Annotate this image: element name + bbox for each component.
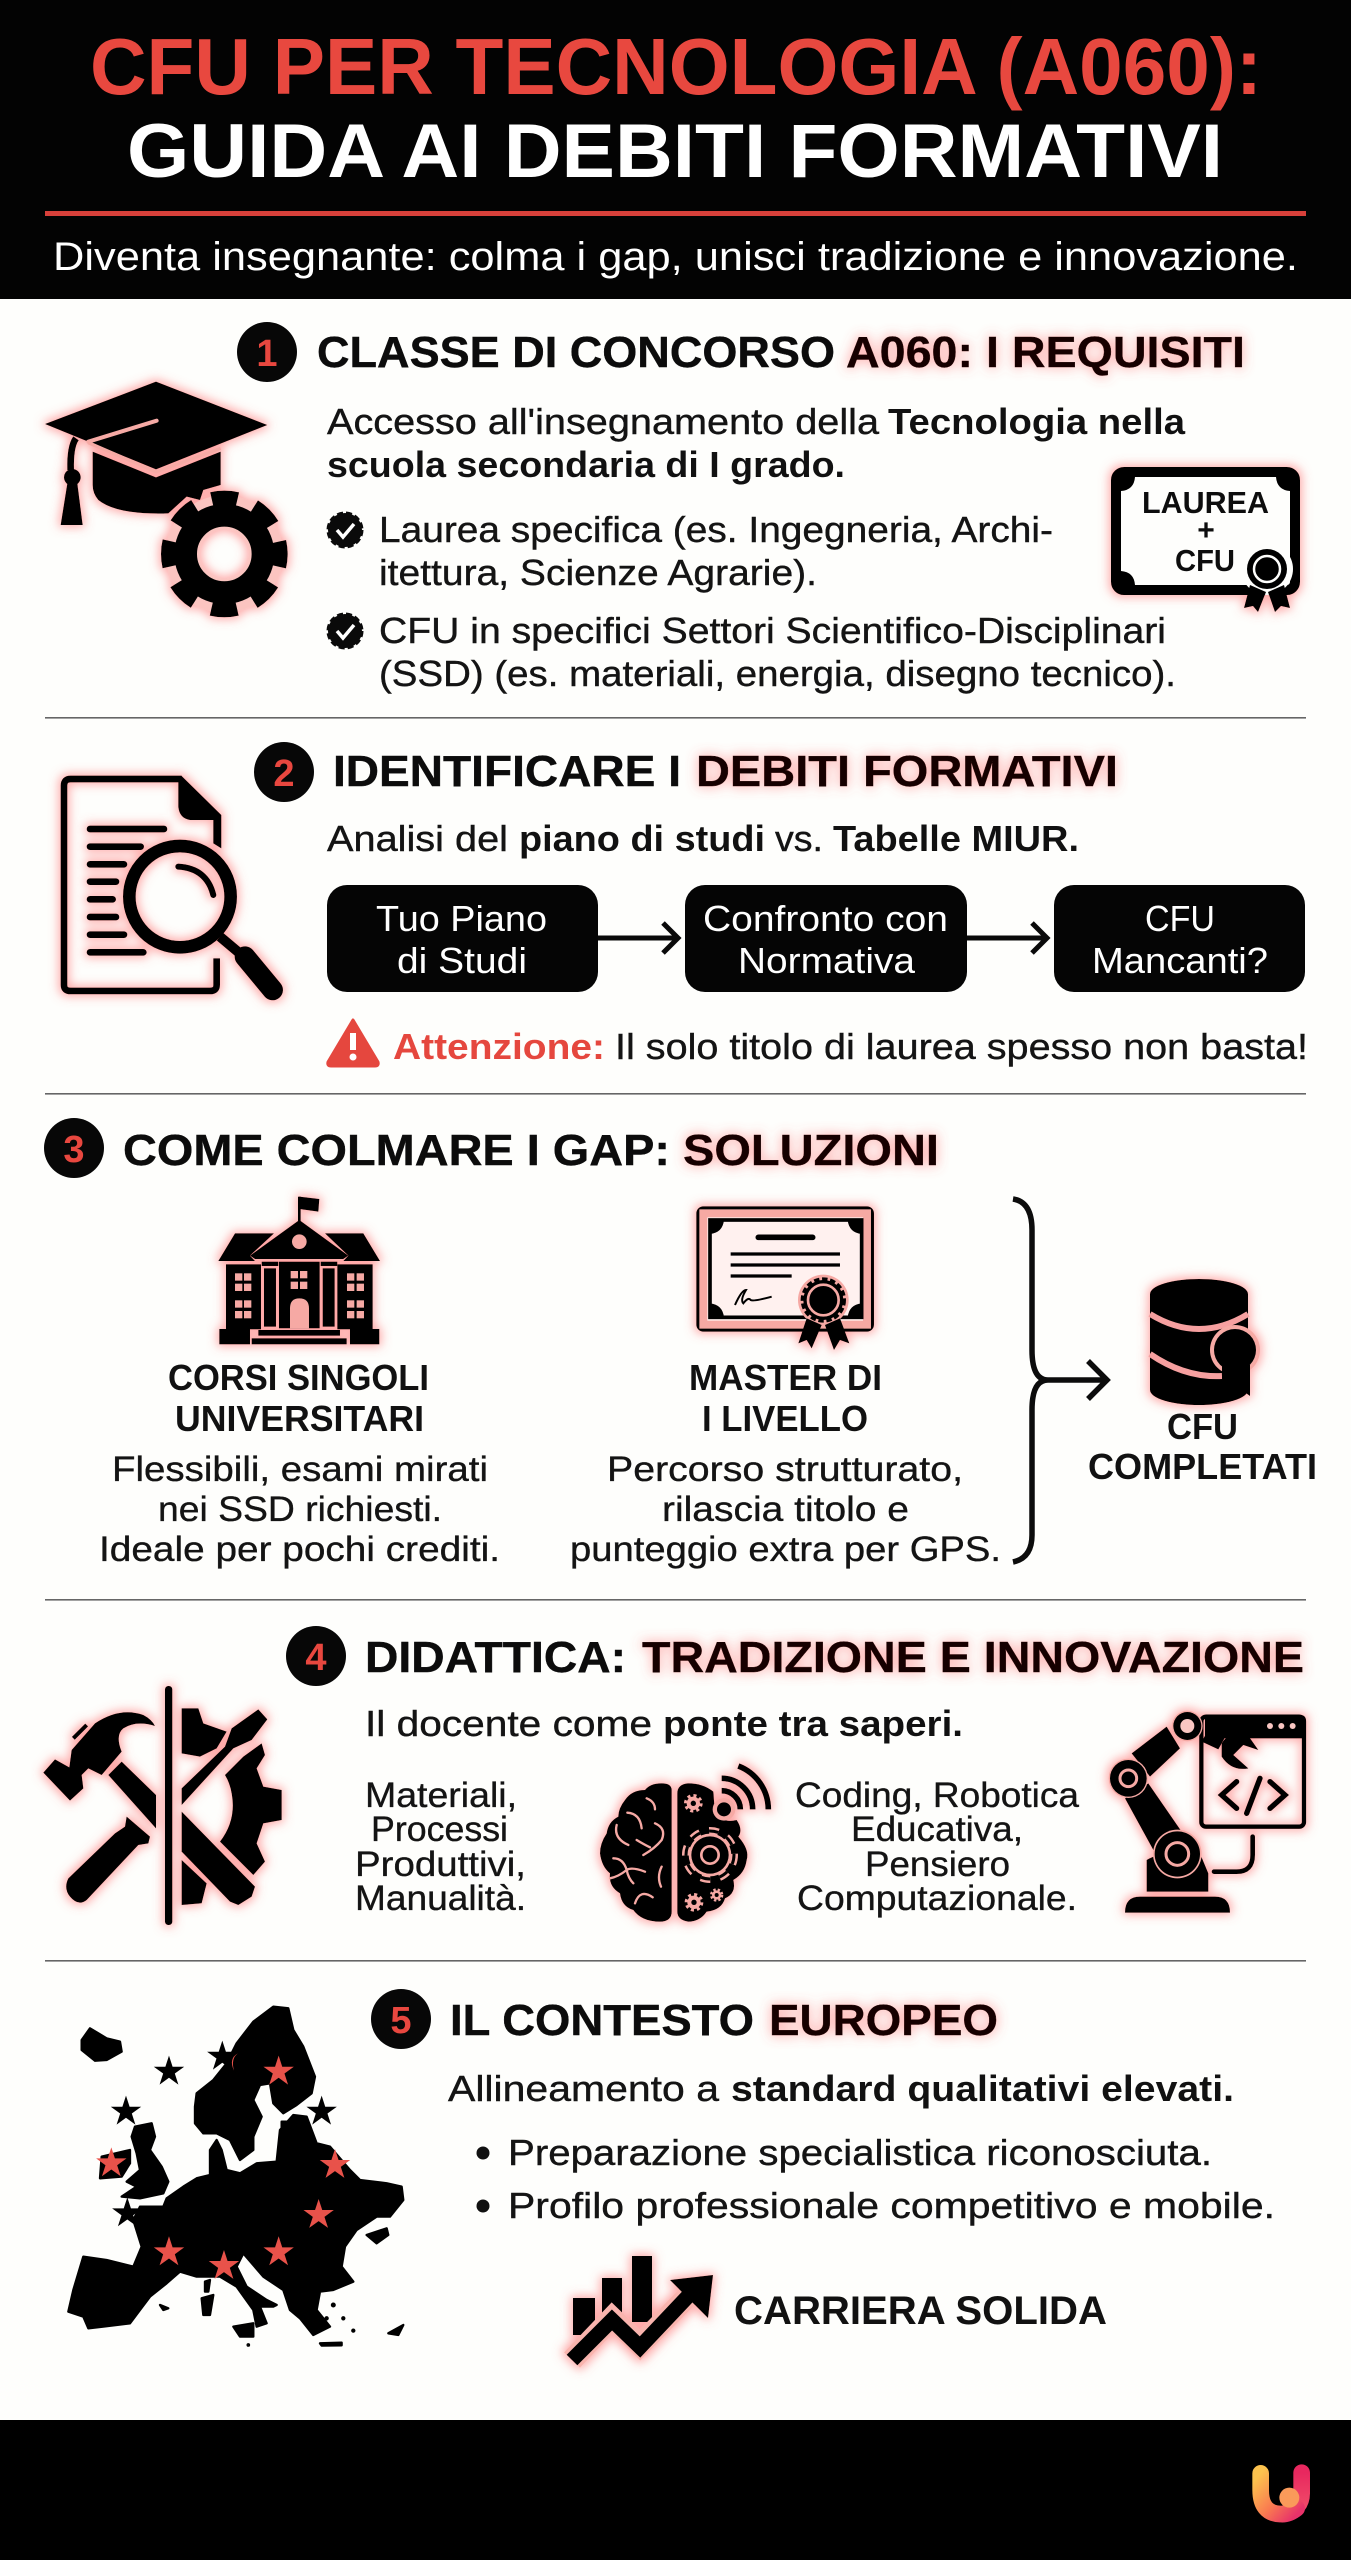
card text: corsi singoli	[99, 1357, 500, 1569]
number badge 4	[286, 1626, 346, 1686]
flow box: confronto: Confronto con	[703, 898, 948, 939]
number badge 1: 1	[256, 333, 278, 375]
panel: section 2 debiti formativi	[64, 742, 1308, 1067]
header band	[0, 0, 1351, 299]
header red rule	[45, 211, 1306, 216]
number badge 4: 4	[305, 1637, 327, 1679]
result label	[1088, 1406, 1317, 1487]
card text: corsi singoli: Flessibili, esami mirati	[112, 1450, 488, 1489]
card text: corsi singoli: nei SSD richiesti.	[158, 1490, 442, 1529]
icon: laurea + cfu certificate	[1116, 472, 1295, 612]
result label: COMPLETATI	[1088, 1446, 1317, 1487]
text: ponte tra saperi	[365, 1703, 963, 1744]
label: carriera solida: CARRIERA SOLIDA	[734, 2289, 1107, 2333]
heading 1: A060: I REQUISITI	[846, 328, 1245, 377]
heading 3: SOLUZIONI	[683, 1126, 939, 1175]
card text: master: Percorso strutturato,	[607, 1450, 963, 1489]
text: tradizione column: Manualità.	[355, 1879, 526, 1918]
bullet: laurea specifica	[328, 509, 1053, 593]
bullet: laurea specifica: Laurea specifica (es. Ingegneria, Archi-	[379, 509, 1053, 550]
heading 2	[333, 747, 1118, 796]
icon: hammer and screwdriver	[43, 1686, 282, 1925]
number badge 5	[371, 1989, 431, 2049]
text: ponte tra saperi: Il docente come	[365, 1703, 652, 1744]
text: ponte tra saperi: ponte tra saperi.	[663, 1703, 963, 1744]
card text: corsi singoli: UNIVERSITARI	[175, 1398, 424, 1439]
card text: corsi singoli: Ideale per pochi crediti.	[99, 1530, 500, 1569]
icon: laurea + cfu certificate: LAUREA	[1142, 485, 1269, 520]
heading 1	[317, 328, 1245, 377]
flow box: cfu mancanti: Mancanti?	[1092, 940, 1268, 981]
heading 4: TRADIZIONE E INNOVAZIONE	[642, 1633, 1304, 1682]
panel: section 1 requisiti	[45, 322, 1295, 694]
flow box: confronto	[685, 885, 967, 992]
panel: section 3 soluzioni	[44, 1118, 1317, 1569]
title line 2: GUIDA AI DEBITI FORMATIVI	[127, 109, 1223, 194]
number badge 3	[44, 1118, 104, 1178]
number badge 5: 5	[390, 2000, 412, 2042]
card text: master: MASTER DI	[689, 1357, 882, 1398]
heading 2: IDENTIFICARE I	[333, 747, 681, 796]
text: innovazione column: Computazionale.	[797, 1879, 1077, 1918]
icon: map of europe with stars	[68, 2007, 403, 2346]
number badge 1	[237, 322, 297, 382]
bracket with arrow	[1013, 1199, 1107, 1562]
analysis line: piano di studi	[519, 818, 765, 859]
card text: corsi singoli: CORSI SINGOLI	[168, 1357, 429, 1398]
card text: master: punteggio extra per GPS.	[570, 1530, 1001, 1569]
intro text	[327, 401, 1186, 485]
panel: section 5 contesto europeo	[68, 1989, 1275, 2360]
heading 3: COME COLMARE I GAP:	[123, 1126, 670, 1175]
bullet: CFU in SSD	[328, 610, 1176, 694]
text: innovazione column: Pensiero	[865, 1845, 1010, 1884]
footer band	[0, 2420, 1351, 2560]
number badge 3: 3	[63, 1129, 85, 1171]
icon: document with magnifier	[64, 776, 273, 991]
logo	[1261, 2473, 1302, 2514]
heading 5: IL CONTESTO	[450, 1996, 754, 2045]
arrow	[967, 923, 1047, 953]
result label: CFU	[1167, 1406, 1238, 1447]
flow box: cfu mancanti	[1054, 885, 1305, 992]
icon: robot arm and code window	[1109, 1711, 1306, 1913]
analysis line: vs.	[775, 818, 823, 859]
arrow	[598, 923, 678, 953]
card text: master	[570, 1357, 1001, 1569]
bullet: CFU in SSD: (SSD) (es. materiali, energia, disegno tecnico).	[379, 653, 1176, 694]
intro text: Tecnologia nella	[888, 401, 1186, 442]
warning line: Il solo titolo di laurea spesso non basta!	[615, 1026, 1308, 1067]
flow box: tuo piano	[327, 885, 598, 992]
heading 4: DIDATTICA:	[365, 1633, 626, 1682]
icon: database with seal	[1150, 1279, 1260, 1405]
text: tradizione column: Produttivi,	[355, 1845, 526, 1884]
intro text: Accesso all'insegnamento della	[327, 401, 880, 442]
title line 1: CFU PER TECNOLOGIA (A060):	[90, 22, 1262, 111]
heading 2: DEBITI FORMATIVI	[696, 747, 1118, 796]
heading 5	[450, 1996, 998, 2045]
heading 3	[123, 1126, 939, 1175]
warning line	[328, 1020, 1308, 1067]
heading 4	[365, 1633, 1304, 1682]
analysis line: Tabelle MIUR.	[833, 818, 1079, 859]
bullet: laurea specifica: itettura, Scienze Agrarie).	[379, 552, 817, 593]
analysis line: Analisi del	[327, 818, 508, 859]
flow box: confronto: Normativa	[738, 940, 916, 981]
warning line: Attenzione:	[393, 1026, 605, 1067]
text: standard qualitativi	[448, 2068, 1234, 2109]
icon: laurea + cfu certificate: CFU	[1175, 543, 1235, 578]
text: innovazione column: Educativa,	[851, 1810, 1023, 1849]
card text: master: I LIVELLO	[702, 1398, 868, 1439]
text: tradizione column: Processi	[371, 1810, 508, 1849]
text: standard qualitativi: standard qualitativi elevati.	[731, 2068, 1234, 2109]
icon: master diploma	[699, 1209, 871, 1350]
text: innovazione column	[795, 1776, 1080, 1918]
text: innovazione column: Coding, Robotica	[795, 1776, 1080, 1815]
analysis line	[327, 818, 1079, 859]
flow box: tuo piano: di Studi	[397, 940, 527, 981]
card text: master: rilascia titolo e	[662, 1490, 909, 1529]
text: standard qualitativi: Allineamento a	[448, 2068, 720, 2109]
panel: section 4 didattica	[43, 1626, 1306, 1925]
bullet: preparazione: Preparazione specialistica riconosciuta.	[508, 2132, 1212, 2173]
text: tradizione column	[355, 1776, 526, 1918]
icon: laurea + cfu certificate: +	[1197, 514, 1215, 547]
icon: graduation cap and gear	[45, 382, 279, 609]
intro text: scuola secondaria di I grado.	[327, 444, 845, 485]
heading 1: CLASSE DI CONCORSO	[317, 328, 835, 377]
flow box: tuo piano: Tuo Piano	[376, 898, 547, 939]
bullet: CFU in SSD: CFU in specifici Settori Scientifico-Disciplinari	[379, 610, 1166, 651]
heading 5: EUROPEO	[769, 1996, 998, 2045]
subtitle: Diventa insegnante: colma i gap, unisci tradizione e innovazione.	[53, 235, 1298, 279]
icon: brain with gears and wifi	[600, 1766, 768, 1922]
text: tradizione column: Materiali,	[365, 1776, 517, 1815]
icon: growth chart arrow	[572, 2256, 713, 2360]
bullet: profilo: Profilo professionale competitivo e mobile.	[508, 2185, 1275, 2226]
number badge 2: 2	[273, 753, 295, 795]
flow box: cfu mancanti: CFU	[1145, 898, 1215, 939]
number badge 2	[254, 742, 314, 802]
icon: university building	[218, 1197, 380, 1344]
